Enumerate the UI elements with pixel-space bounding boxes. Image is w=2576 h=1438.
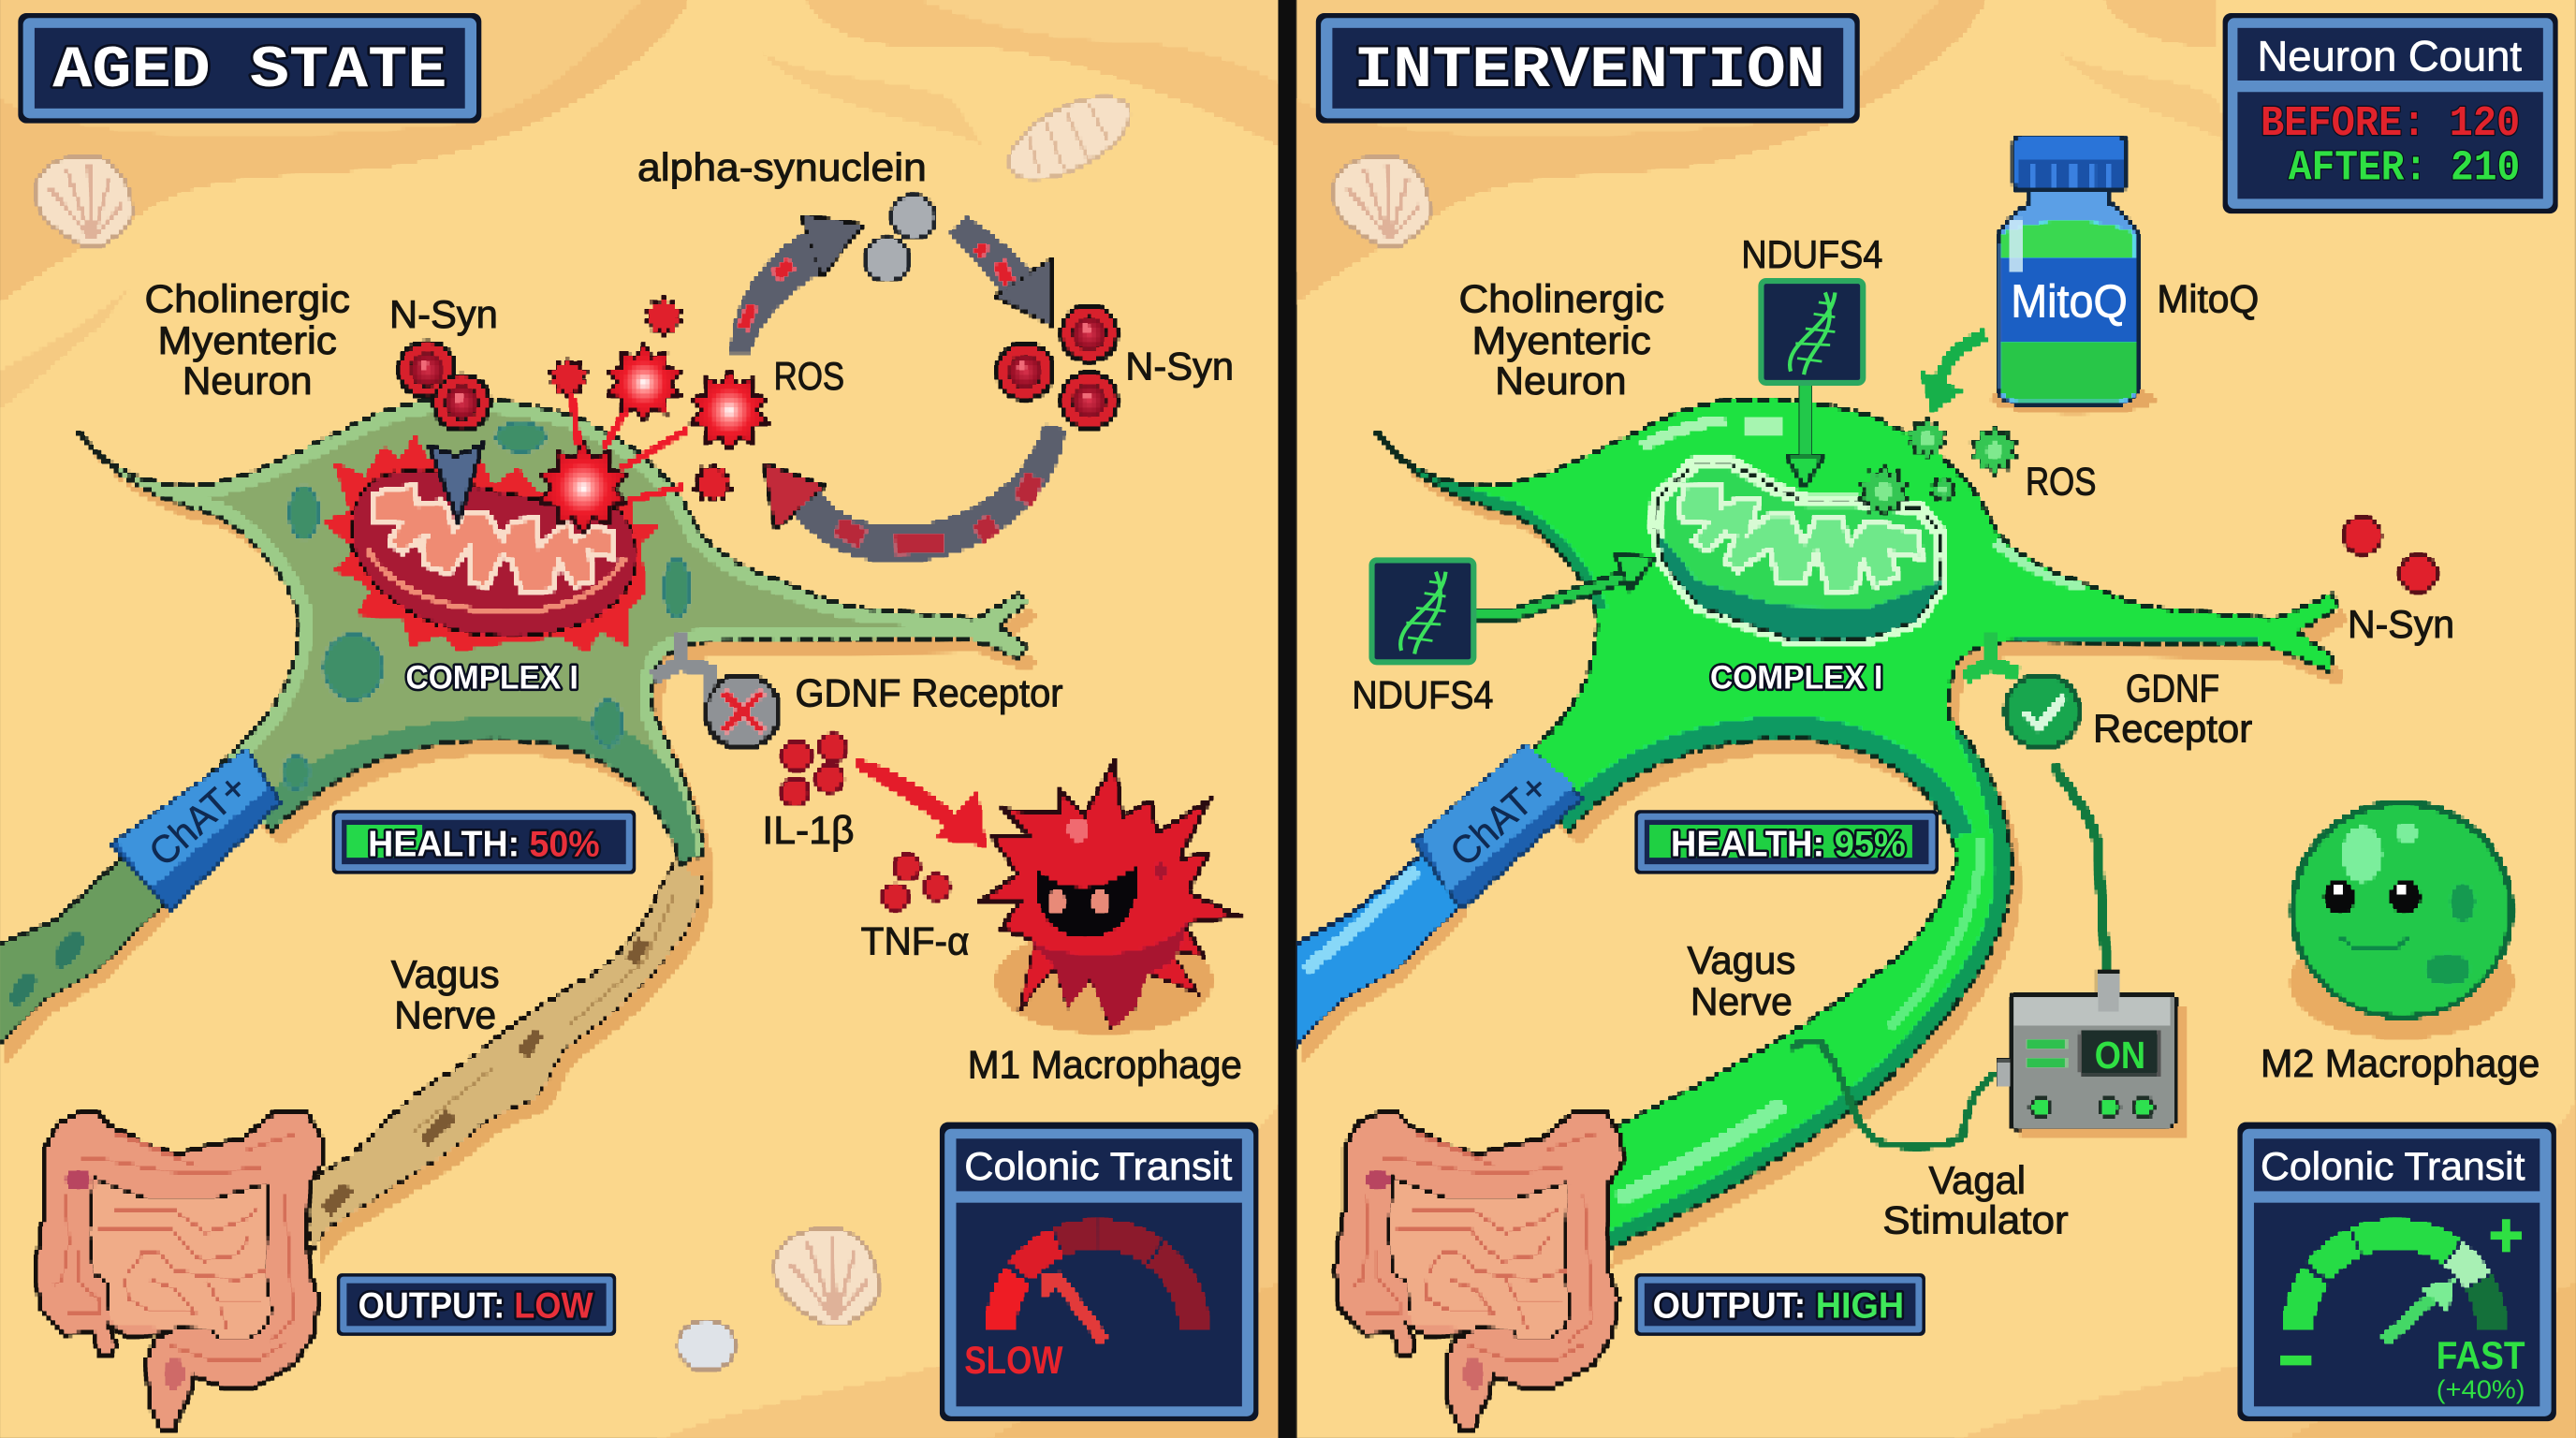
- mitoq bottle: MitoQ: [2011, 277, 2128, 328]
- label: m1 macrophage: M1 Macrophage: [968, 1042, 1242, 1086]
- sand background right: [1296, 0, 2576, 1438]
- panel: aged state: [0, 0, 1280, 1438]
- arrow: cycle up: [731, 215, 862, 353]
- label: vagus nerve: [1687, 938, 1795, 1023]
- label: vagal stimulator: [1882, 1158, 2069, 1241]
- neuron aged: [79, 400, 1027, 862]
- label: ros: ROS: [2026, 459, 2096, 503]
- label: cholinergic myenteric neuron: Myenteric: [1472, 318, 1651, 362]
- chat+ sleeve: ChAT+: [1442, 765, 1557, 874]
- label: cholinergic myenteric neuron: [145, 276, 350, 403]
- vagal stimulator device: [1998, 973, 2185, 1137]
- gdnf receptor active: [1965, 634, 2078, 748]
- label: vagal stimulator: Vagal: [1928, 1158, 2026, 1202]
- arrow: n-syn into mitochondrion: [431, 446, 481, 520]
- ros neutralized: [1859, 418, 2019, 518]
- label: mitoq: MitoQ: [2157, 276, 2259, 320]
- divider: [1278, 0, 1297, 1438]
- gene box ndufs4 left: [1372, 555, 1654, 662]
- ros burst: [541, 299, 767, 533]
- m2 macrophage: [2291, 803, 2513, 1038]
- label: m2 macrophage: M2 Macrophage: [2261, 1041, 2539, 1085]
- label: gdnf receptor: [2093, 666, 2252, 750]
- label: complex i: COMPLEX I: [1710, 659, 1882, 696]
- output badge right: [1634, 1273, 1925, 1336]
- icon: seashell: [1334, 156, 1429, 244]
- health badge right: [1634, 810, 1939, 874]
- gauge slow: [1001, 1234, 1194, 1341]
- label: ros: ROS: [774, 354, 844, 398]
- label: vagus nerve: Vagus: [391, 952, 500, 996]
- icon: seashell upper left: [37, 156, 131, 244]
- neuron shadow: [1386, 415, 2346, 1267]
- label: n-syn left: N-Syn: [389, 292, 498, 336]
- mitoq bottle: [1991, 137, 2156, 414]
- title: intervention: [1316, 13, 1860, 124]
- label: ndufs4 top: NDUFS4: [1741, 232, 1882, 276]
- n-syn dots sparse: [2344, 518, 2437, 592]
- chat+ sleeve: ChAT+: [140, 765, 256, 874]
- sand background left: [0, 0, 1280, 1438]
- colon: [36, 1113, 323, 1431]
- label: cholinergic myenteric neuron: [1459, 276, 1664, 403]
- label: cholinergic myenteric neuron: Myenteric: [158, 318, 337, 362]
- panel: colonic transit slow: SLOW: [964, 1338, 1063, 1382]
- chat+ sleeve: [1414, 746, 1580, 909]
- chat+ sleeve: [111, 751, 279, 909]
- panel: colonic transit fast: [2237, 1123, 2556, 1421]
- health badge left: HEALTH: 50%: [368, 824, 600, 864]
- label: n-syn: N-Syn: [2348, 602, 2454, 646]
- output badge left: [337, 1273, 616, 1336]
- icon: seashell lower: [775, 1228, 878, 1325]
- title: intervention: INTERVENTION: [1354, 37, 1825, 104]
- n-syn cluster right: [996, 304, 1119, 431]
- label: gdnf receptor: Receptor: [2093, 706, 2252, 750]
- label: vagus nerve: Nerve: [1690, 979, 1793, 1023]
- neuron count panel: [2223, 13, 2558, 213]
- m1 macrophage: [981, 764, 1236, 1034]
- label: vagus nerve: [391, 952, 500, 1037]
- panel: colonic transit slow: Colonic Transit: [964, 1144, 1233, 1188]
- vagal stimulator device: ON: [2095, 1034, 2145, 1077]
- arrow: cytokines to macrophage: [857, 759, 986, 846]
- neuron count panel: AFTER: 210: [2289, 143, 2520, 192]
- label: cholinergic myenteric neuron: Neuron: [183, 359, 313, 403]
- neuron count panel: BEFORE: 120: [2261, 99, 2520, 148]
- output badge right: OUTPUT: HIGH: [1653, 1286, 1904, 1327]
- panel: colonic transit fast: FAST: [2437, 1333, 2525, 1377]
- icon: pebble: [679, 1321, 735, 1371]
- label: n-syn right: N-Syn: [1125, 344, 1234, 388]
- vagus nerve frayed: [305, 851, 712, 1262]
- label: vagal stimulator: Stimulator: [1882, 1197, 2069, 1241]
- n-syn cluster on neuron: [398, 340, 491, 433]
- gene box ndufs4 top: [1761, 281, 1863, 486]
- panel: intervention: [1296, 0, 2576, 1438]
- label: complex i: COMPLEX I: [406, 659, 578, 696]
- label: vagus nerve: Vagus: [1687, 938, 1795, 982]
- tnf alpha dots: [883, 855, 949, 909]
- stimulator lead to nerve: [1791, 1041, 2011, 1147]
- label: vagus nerve: Nerve: [394, 993, 496, 1037]
- label: ndufs4 left: NDUFS4: [1352, 672, 1493, 716]
- axon left of sleeve: [0, 846, 169, 1064]
- arrow: cycle return: [764, 424, 1064, 562]
- arrow: mitoq to neuron: [1921, 335, 1984, 413]
- organelles: [283, 422, 690, 788]
- title: aged state: [18, 13, 481, 124]
- label: tnf alpha: TNF-α: [861, 919, 970, 963]
- neuron shadow: [89, 415, 1036, 877]
- panel: colonic transit fast: (+40%): [2437, 1375, 2525, 1404]
- alpha-synuclein monomers: [866, 196, 935, 281]
- stimulator lead to receptor: [2054, 766, 2106, 977]
- health badge left: [332, 810, 636, 874]
- panel: colonic transit fast: Colonic Transit: [2261, 1144, 2525, 1188]
- label: gdnf receptor: GDNF: [2126, 666, 2219, 710]
- title: aged state: AGED STATE: [52, 37, 446, 104]
- output badge left: OUTPUT: LOW: [359, 1286, 593, 1327]
- mitochondrion healthy: [1655, 463, 1940, 639]
- label: cholinergic myenteric neuron: Cholinergic: [145, 276, 350, 320]
- label: gdnf receptor: GDNF Receptor: [795, 671, 1063, 715]
- axon left of sleeve restored: [1296, 846, 1467, 1064]
- label: alpha-synuclein: alpha-synuclein: [637, 145, 927, 189]
- gdnf receptor blocked: [654, 634, 779, 748]
- label: il-1 beta: IL-1β: [762, 808, 855, 852]
- neuron restored with thick vagus nerve: [1377, 400, 2336, 1252]
- icon: seashell upper right: [1007, 94, 1130, 182]
- label: cholinergic myenteric neuron: Neuron: [1495, 359, 1627, 403]
- colon: [1336, 1113, 1622, 1431]
- arrow: cycle right: [949, 217, 1051, 325]
- mitochondrion damaged: [323, 435, 660, 653]
- neuron count panel: Neuron Count: [2257, 32, 2522, 80]
- health badge right: HEALTH: 95%: [1671, 824, 1906, 864]
- panel: colonic transit slow: [940, 1123, 1258, 1421]
- gauge fast: [2298, 1234, 2492, 1341]
- il-1 beta dots: [782, 734, 846, 805]
- label: cholinergic myenteric neuron: Cholinergic: [1459, 276, 1664, 320]
